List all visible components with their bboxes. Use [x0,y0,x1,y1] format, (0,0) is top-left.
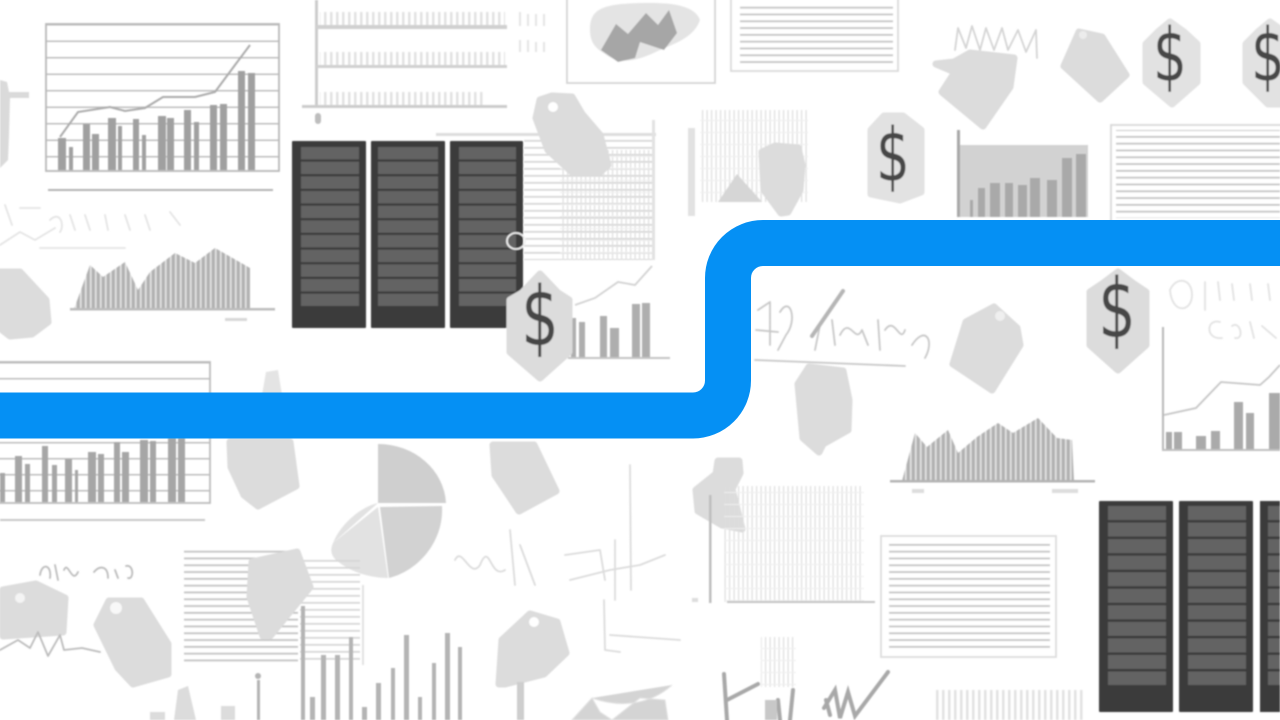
chart: top-centre rows [302,0,544,124]
chart: bottom left mountains [572,685,672,720]
table: lower centre lines [881,536,1056,657]
price tag: dollar top right: $ [1153,13,1187,99]
price tag: dollar centre [871,113,921,200]
sketch: centre handwriting lower [455,465,680,652]
pie chart [331,444,446,578]
dollar tag: right [1090,261,1146,370]
price tag: upper centre [536,96,608,172]
sketch: top right scribble [955,26,1037,58]
price tag: bottom centre [499,614,566,720]
dollar tag: right: $ [1098,261,1136,357]
chart: top-left bar chart [46,24,279,191]
price tag: below left chart [230,442,296,506]
chart: right-centre area chart [890,418,1095,493]
data rack: left [292,141,525,328]
table: top-centre lines [731,0,898,71]
table: lower left lines [184,548,364,665]
price tag: left edge middle [0,272,48,336]
data rack: lower right [1099,501,1280,712]
price tag: below blue line centre [798,367,849,452]
price tag: centre below line [493,445,556,511]
chart: grid centre right [692,486,875,603]
chart: bottom scribble line [724,637,888,720]
chart: left bar chart under blue line [0,362,210,521]
blue flow line [0,243,1280,416]
sketch: left handwriting [0,205,180,248]
dollar tag: by rack [510,269,569,378]
price tag: by grid [762,146,802,213]
price tag: lower left centre [250,552,310,636]
chart: left area chart [70,248,275,321]
grid table beside rack [436,120,656,260]
chart: grid with peak [688,110,808,216]
table: upper right lines [1111,125,1280,225]
price tag: dollar centre: $ [876,113,910,199]
sketch: lower left handwriting [0,565,132,656]
price tag: lower left edge [3,584,65,636]
chart: shaded bar chart [957,130,1088,217]
price tag: lower left [97,601,168,684]
shape: bottom left fragments [150,686,235,720]
price tag: small centre [696,461,742,529]
chart: bottom tall bars [255,606,462,720]
chart: top mountain thumbnail [567,0,715,83]
sketch: centre handwriting [755,291,929,366]
chart: bottom right faint bars [935,690,1085,720]
chart: small bars by dollar tag [568,266,670,359]
dollar tag: by rack: $ [521,269,559,365]
price tag: top right second [1064,31,1126,99]
chart: right line and bars [1162,327,1280,451]
figure: small figure above blue line [262,370,282,395]
sketch: upper right text [1170,281,1276,338]
price tag: right of handwriting [953,307,1020,390]
price tag: dollar top right [1146,13,1197,104]
price tag: top right blob [936,53,1014,126]
figure: left edge blob [0,80,29,168]
